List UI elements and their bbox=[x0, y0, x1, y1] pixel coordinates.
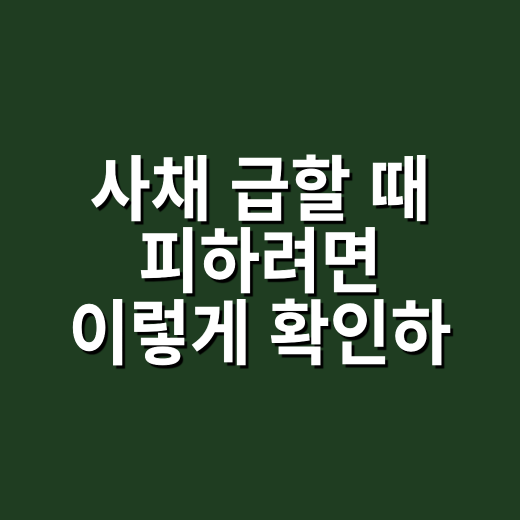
title bbox=[69, 150, 454, 374]
title line 1: 사채 급할 때 bbox=[90, 150, 430, 230]
title line 2: 피하려면 bbox=[139, 222, 381, 302]
title line 3: 이렇게 확인하 bbox=[69, 294, 451, 374]
